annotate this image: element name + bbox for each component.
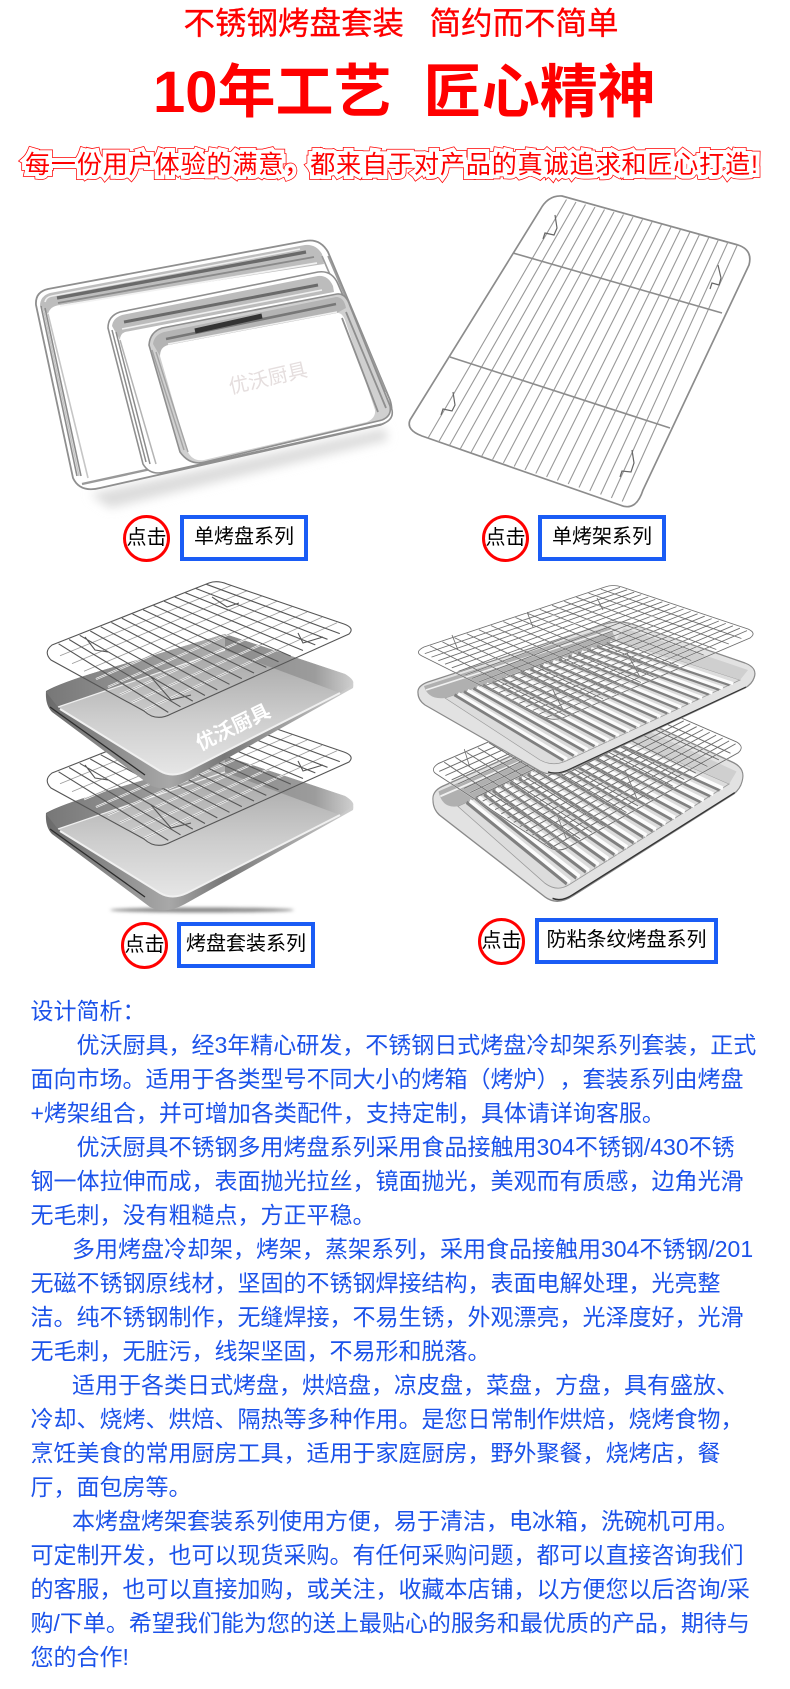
label box: 防粘条纹烤盘系列 (546, 929, 706, 951)
click circle: 点击 (482, 930, 522, 952)
large tray (36, 240, 392, 489)
button: non-stick striped tray series (478, 918, 718, 965)
click circle (478, 918, 525, 965)
text block: design description: 无磁不锈钢原线材，坚固的不锈钢焊接结构，表面电解处理，光亮整 (30, 1270, 720, 1296)
click circle (121, 922, 168, 969)
click circle: 点击 (124, 934, 164, 956)
text block: design description: 冷却、烧烤、烘焙、隔热等多种作用。是您日常制作烘焙，烧烤食物， (30, 1406, 744, 1432)
text block: design description: 购/下单。希望我们能为您的送上最贴心的服务和最优质的产品，期待与 (30, 1610, 750, 1636)
label box: 烤盘套装系列 (186, 933, 306, 955)
label box: 单烤架系列 (552, 526, 652, 548)
text block: design description: 优沃厨具不锈钢多用烤盘系列采用食品接触用304不锈钢/430不锈 (76, 1134, 735, 1160)
medium tray (108, 272, 392, 473)
lower tray (46, 756, 353, 910)
watermark: 优沃厨具 (192, 700, 274, 755)
main title: 10年工艺 匠心精神 (153, 60, 656, 125)
text block: design description (30, 998, 756, 1670)
upper rack (418, 586, 753, 719)
text block: design description: 无毛刺，没有粗糙点，方正平稳。 (30, 1202, 376, 1228)
button: single rack series (482, 515, 666, 562)
button: single tray series (123, 515, 308, 562)
top heading: 简约而不简单 (430, 5, 619, 41)
text block: design description: 适用于各类日式烤盘，烘焙盘，凉皮盘，菜盘，方盘，具有盛放、 (72, 1372, 739, 1398)
image: non-stick striped tray and rack set (418, 586, 755, 901)
text block: design description: 您的合作! (30, 1644, 129, 1670)
upper tray (46, 634, 353, 788)
click circle: 点击 (126, 527, 166, 549)
text block: design description: 的客服，也可以直接加购，或关注，收藏本店铺，以方便您以后咨询/采 (30, 1576, 750, 1602)
label box (180, 515, 308, 561)
text block: design description: 钢一体拉伸而成，表面抛光拉丝，镜面抛光，美观而有质感，边角光滑 (30, 1168, 744, 1194)
text block: design description: +烤架组合，并可增加各类配件，支持定制，具体请详询客服。 (30, 1100, 665, 1126)
text block: design description: 优沃厨具，经3年精心研发，不锈钢日式烤盘冷却架系列套装，正式 (76, 1032, 756, 1058)
image: tray and rack set (46, 582, 353, 912)
upper striped tray (418, 622, 755, 774)
lower rack (47, 710, 351, 845)
text block: design description: 厅，面包房等。 (30, 1474, 192, 1500)
watermark: 优沃厨具 (227, 358, 310, 399)
click circle (123, 515, 170, 562)
lower striped tray (433, 712, 743, 901)
text block: design description: 洁。纯不锈钢制作，无缝焊接，不易生锈，外观漂亮，光泽度好，光滑 (30, 1304, 744, 1330)
upper rack (47, 582, 351, 717)
label box (535, 918, 718, 964)
text block: design description: 本烤盘烤架套装系列使用方便，易于清洁，电冰箱，洗碗机可用。 (72, 1508, 739, 1534)
text block: design description: 设计简析： (30, 998, 146, 1024)
text block: design description: 可定制开发，也可以现货采购。有任何采购问题，都可以直接咨询我们 (30, 1542, 744, 1568)
label box (177, 922, 315, 968)
lower rack (433, 690, 741, 850)
text block: design description: 面向市场。适用于各类型号不同大小的烤箱（烤炉），套装系列由烤盘 (30, 1066, 744, 1092)
top heading: 不锈钢烤盘套装 (184, 5, 404, 41)
label box: 单烤盘系列 (194, 526, 294, 548)
text block: design description: 多用烤盘冷却架，烤架，蒸架系列，采用食品接触用304不锈钢/201 (72, 1236, 753, 1262)
banner slogan: 每一份用户体验的满意，都来自于对产品的真诚追求和匠心打造! (25, 151, 758, 179)
text block: design description: 无毛刺，无脏污，线架坚固，不易形和脱落。 (30, 1338, 490, 1364)
image: three nested stainless trays (36, 240, 392, 508)
click circle: 点击 (486, 527, 526, 549)
label box (538, 515, 666, 561)
image: single cooling rack (409, 196, 750, 507)
button: tray set series (121, 922, 315, 969)
small tray (149, 294, 390, 463)
click circle (482, 515, 529, 562)
text block: design description: 烹饪美食的常用厨房工具，适用于家庭厨房，野外聚餐，烧烤店，餐 (30, 1440, 720, 1466)
top heading (184, 5, 619, 41)
